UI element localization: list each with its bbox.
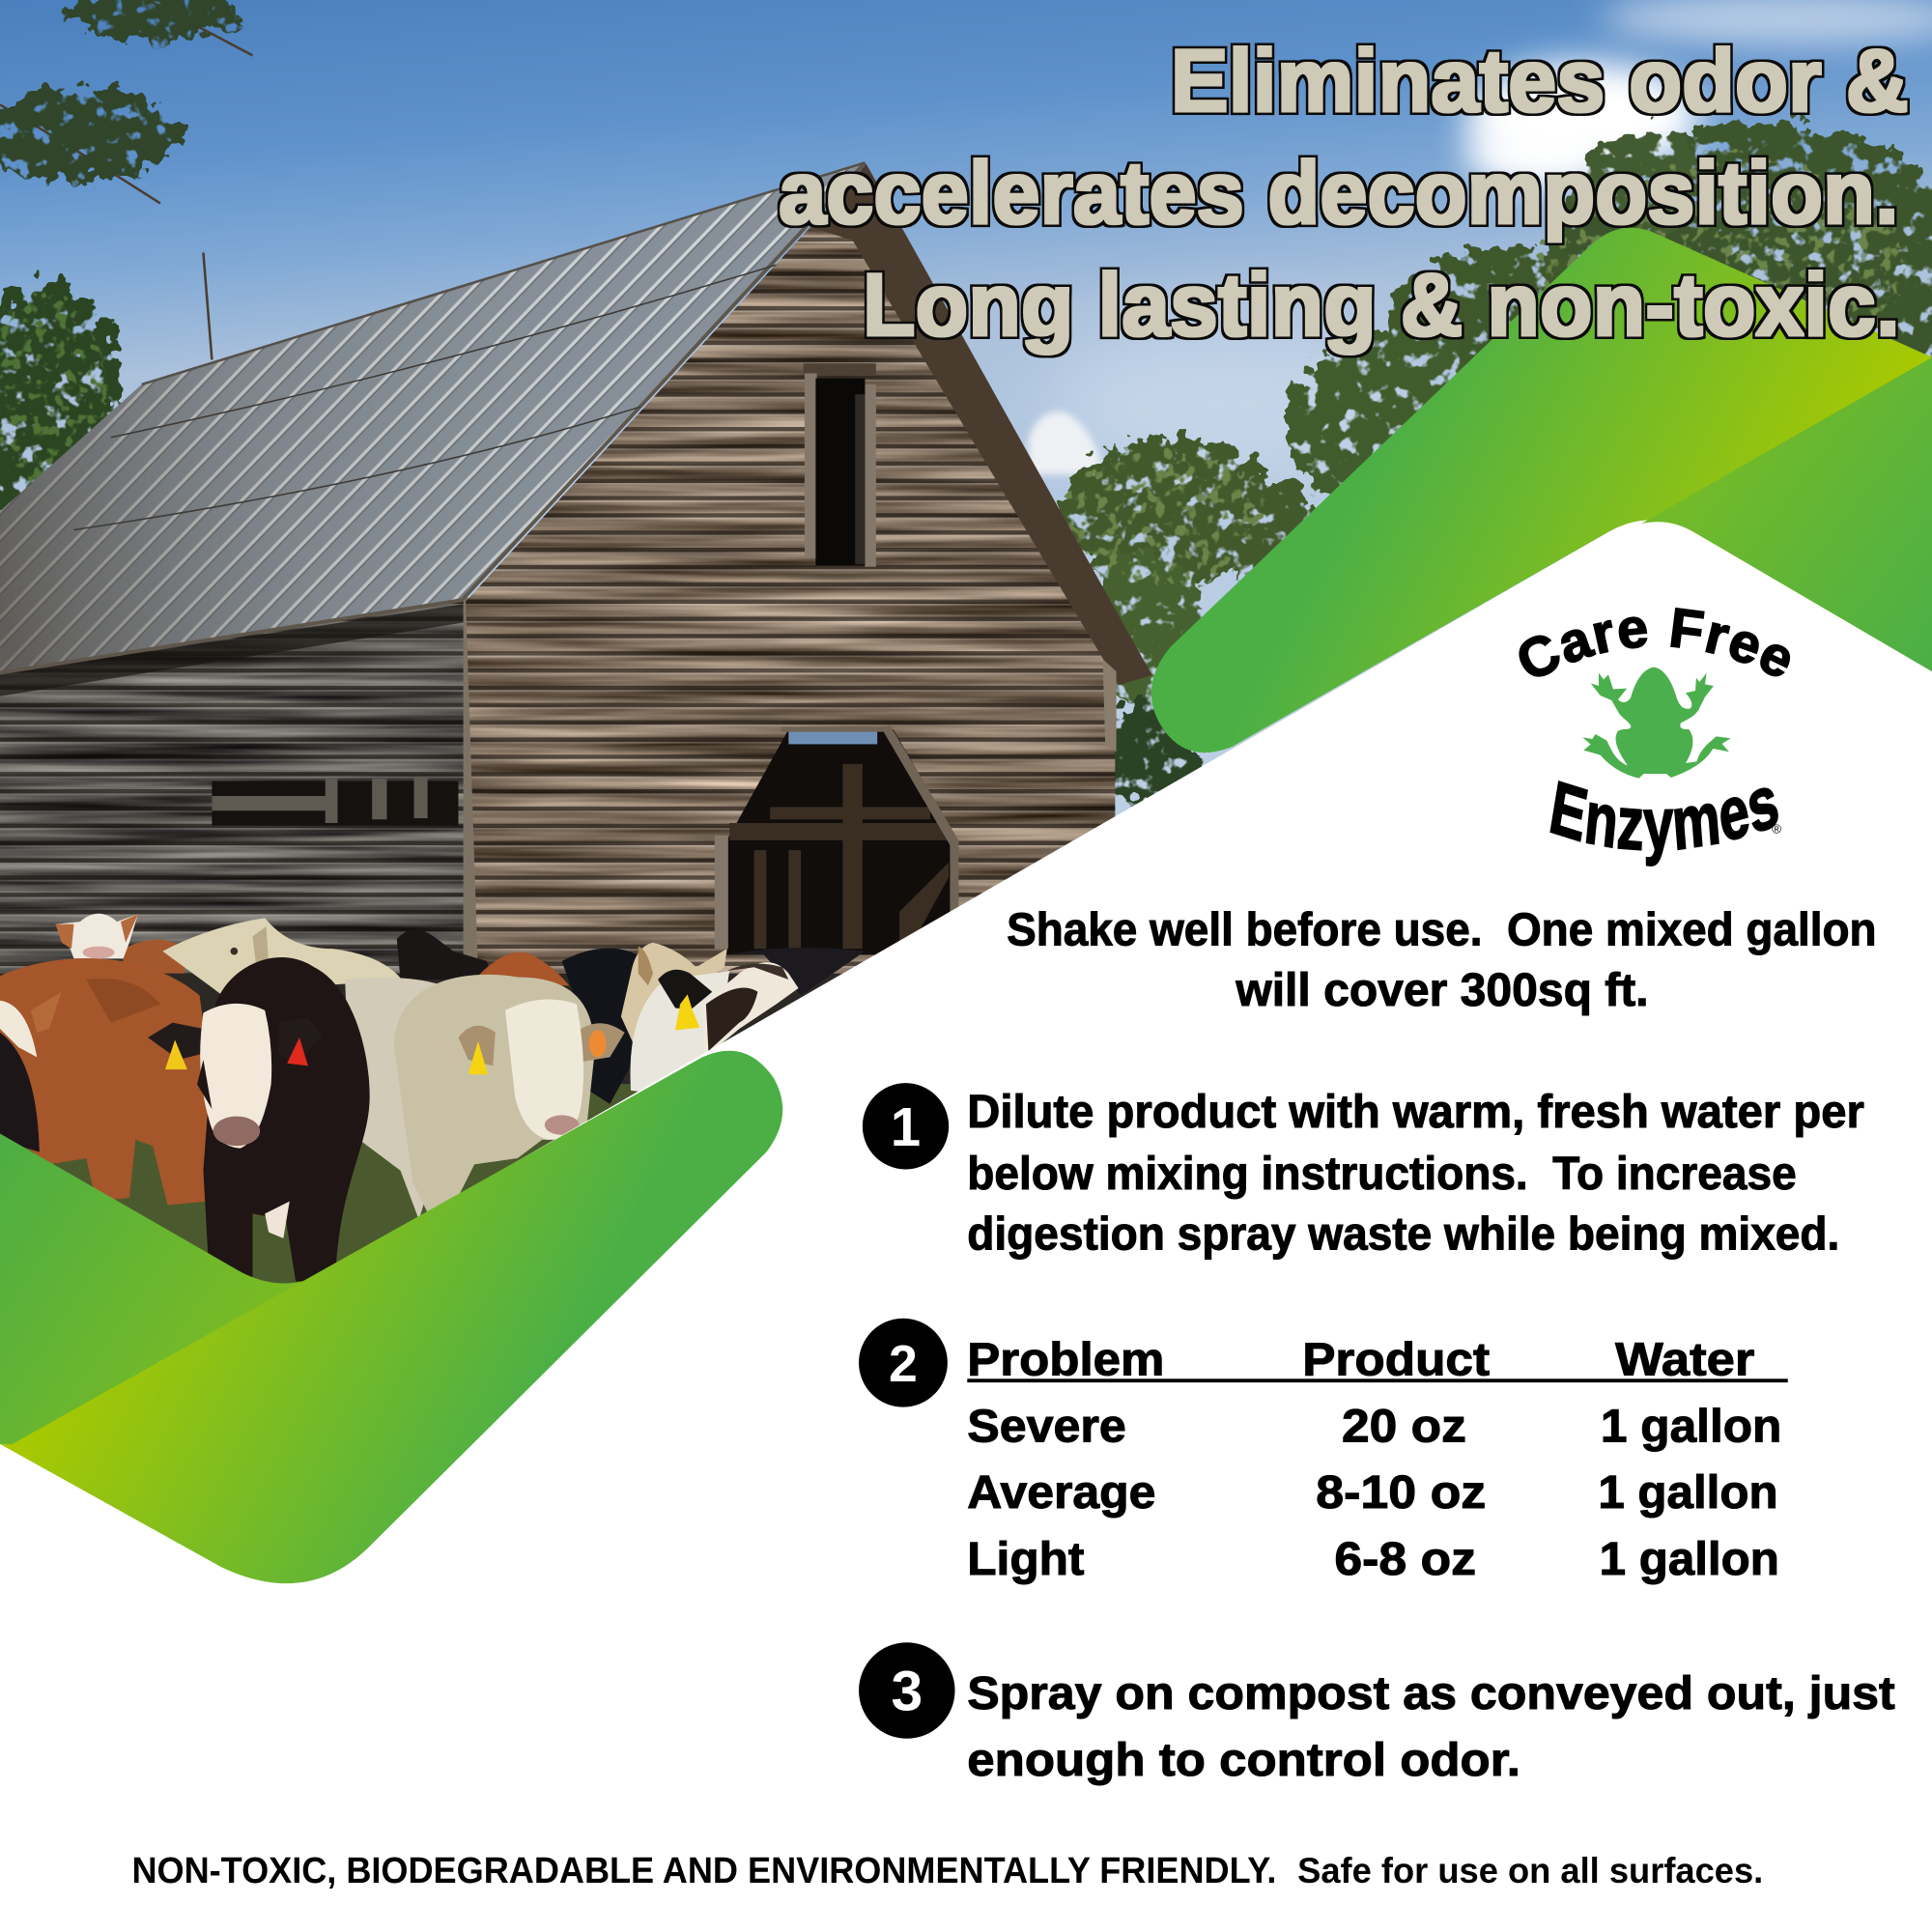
black cow at far left edge [0,1033,40,1152]
black white-faced cow [148,957,370,1282]
barn gable wall [466,164,1152,974]
trees behind the barn and at the left [0,0,1932,807]
table header: Product [1302,1333,1490,1385]
piebald cow [702,962,799,1057]
upper window [804,363,876,567]
logo: Care Free Enzymes [1519,607,1791,867]
mixing table [967,1333,1788,1585]
title: accelerates decomposition. [779,144,1899,242]
step 1 number badge: 1 [891,1096,921,1157]
text block: shake well [1007,903,1877,1016]
step 1 text [967,1086,1864,1260]
step 2 number badge [859,1319,948,1407]
row: light: 6-8 oz [1334,1533,1476,1585]
title: Long lasting & non-toxic. [863,256,1900,355]
grass and shaded ground behind the herd [0,974,843,1283]
tan cow behind [620,943,726,1042]
step 3 text [967,1667,1895,1786]
brown cow [0,958,212,1205]
step 1 number badge [863,1083,949,1169]
registered mark: ® [1772,822,1781,837]
barn door opening [715,724,958,955]
green chevron: upper right [1151,228,1932,753]
row: light: 1 gallon [1600,1533,1779,1585]
table header [967,1333,1788,1385]
logo text: Care Free: Care Free [1519,607,1791,677]
cattle at rear [124,929,865,1104]
icon: green frog [1582,668,1731,779]
green chevron: lower left [0,1051,782,1583]
row: light [967,1533,1779,1585]
footer statement: NON-TOXIC, BIODEGRADABLE AND ENVIRONMENTALLY FRIENDLY. [131,1850,1276,1891]
step 3 text: enough to control odor. [967,1734,1520,1786]
table header: Problem [967,1333,1164,1385]
big cream cow [394,975,625,1220]
text block: shake well: will cover 300sq ft. [1235,964,1649,1016]
sky and clouds [0,0,1932,974]
step 1 text: below mixing instructions. To increase [967,1148,1797,1200]
text block: shake well: Shake well before use. One mixed gallon [1007,903,1877,955]
panel: white instruction area [0,520,1932,1932]
step 3 text: Spray on compost as conveyed out, just [967,1667,1895,1719]
row: average: Average [967,1466,1155,1519]
cream cow neck and back [162,918,402,1005]
title: Eliminates odor & [1171,32,1909,130]
row: severe: 20 oz [1342,1400,1466,1452]
logo text: Enzymes: Enzymes [1549,781,1778,867]
white-faced cow, far left [55,914,138,958]
row: light: Light [967,1533,1084,1585]
row: severe: Severe [967,1400,1126,1452]
step 1 text: Dilute product with warm, fresh water per [967,1086,1864,1138]
footer statement: Safe for use on all surfaces. [1297,1851,1763,1890]
row: average: 8-10 oz [1316,1466,1486,1519]
white cow with yellow tag [630,970,729,1092]
cattle herd [0,914,865,1282]
pale cow behind [345,978,443,1220]
step 3 number badge [859,1642,955,1739]
barn side wall [0,598,479,985]
barn metal roof [0,162,865,672]
step 2 number badge: 2 [889,1336,918,1393]
row: average [967,1466,1778,1519]
table header: Water [1615,1333,1754,1385]
row: average: 1 gallon [1598,1466,1778,1519]
row: severe: 1 gallon [1601,1400,1781,1452]
step 1 text: digestion spray waste while being mixed. [967,1208,1839,1260]
title [779,32,1909,355]
photo: barn, trees and cattle under a blue sky [0,0,1932,1355]
step 3 number badge: 3 [891,1660,923,1722]
row: severe [967,1400,1781,1452]
